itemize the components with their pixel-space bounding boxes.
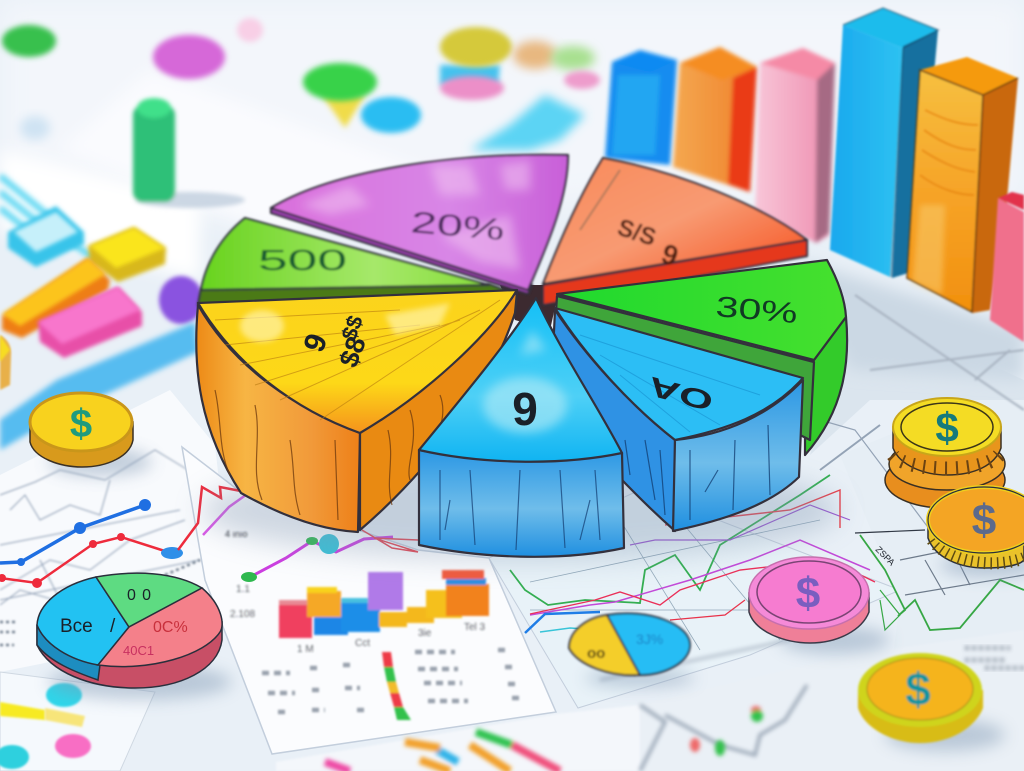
blurred table text: 3ie [418, 628, 432, 639]
slice: yellow: $$ [336, 312, 368, 344]
stack top coin [893, 427, 1001, 475]
blue line series [0, 505, 145, 563]
mini pie: bottom left: / [110, 616, 116, 637]
mini pie: centre: 3J% [636, 631, 663, 647]
coin stack: right: $ [935, 404, 959, 451]
slice: yellow [196, 290, 517, 532]
slice: blue centre [419, 298, 624, 557]
paper: far right chart: ZSPA [874, 544, 897, 568]
paper: centre bottom report [178, 447, 556, 754]
blurred table text [230, 584, 486, 655]
paper: centre bottom report: 4 ınıo [225, 529, 248, 539]
paper: far right chart [800, 260, 1024, 680]
bar: right pink [990, 192, 1024, 342]
mini pie: bottom left [37, 573, 222, 688]
stack bottom coin [885, 452, 1005, 508]
centre line series [250, 537, 393, 577]
coin: pink [749, 557, 869, 643]
slice: purple 20% [271, 155, 568, 294]
slice: orange top: 6 [657, 237, 683, 272]
slice: green left: 500 [258, 245, 347, 277]
coin shadows [48, 448, 1024, 751]
coin: left gold: $ [70, 402, 92, 446]
coin: bottom right: $ [905, 663, 931, 715]
slice: green right [556, 260, 847, 455]
mini bar chart [279, 570, 489, 638]
coin: left gold [30, 393, 133, 467]
slice: green right: 30% [714, 291, 799, 330]
paper: bottom sheets [0, 630, 1024, 771]
coin: bottom right [858, 653, 983, 743]
slice: purple 20%: 20% [409, 206, 506, 247]
coin: right single: $ [972, 496, 996, 545]
stack middle coin [889, 438, 1005, 490]
red line series [0, 537, 171, 583]
slice: blue right: OA [645, 371, 716, 417]
slice: yellow: $8 [333, 333, 372, 371]
pie shadow [200, 460, 840, 560]
slice: orange top [543, 158, 807, 305]
mini pie: centre: oo [587, 645, 605, 662]
blue trend [525, 612, 600, 633]
mini pie: centre [569, 613, 690, 675]
blurred table text: 1 M [297, 644, 314, 655]
red and magenta zigzag [178, 487, 246, 550]
bar chart: blurred 3D bars [605, 8, 1024, 342]
slice: blue centre: 9 [512, 383, 538, 435]
pie hub [500, 285, 560, 330]
coin: pink: $ [796, 569, 820, 618]
slice: blue right [551, 308, 803, 531]
bar: blue small [605, 50, 677, 165]
mini pie: bottom left: 40C1 [123, 643, 154, 658]
vertical colour strip [382, 652, 411, 720]
slice: orange top: S/S [614, 214, 659, 252]
coin stack: right [885, 398, 1005, 508]
blurred table text: 2.108 [230, 609, 255, 620]
slice: yellow: 9 [298, 329, 334, 356]
blurred left blocks [0, 176, 203, 450]
mini pie: bottom left: 0C% [153, 619, 188, 636]
paper: right chart [489, 475, 900, 708]
blurred table text: 1.1 [236, 584, 250, 595]
blurred table text: Tel 3 [464, 622, 486, 633]
bar: tall blue [830, 8, 938, 278]
coin: right single [928, 487, 1024, 568]
mini pie: bottom left: 00 [127, 587, 151, 604]
slice: green left [198, 218, 510, 305]
pie chart [196, 155, 847, 557]
blurred background blobs [2, 18, 600, 150]
paper: left line chart [0, 390, 235, 672]
blurred table text: Cct [355, 638, 370, 649]
bar: tall orange [907, 57, 1018, 313]
bar: orange [673, 47, 757, 192]
mini pie: bottom left: Bce [60, 616, 93, 637]
bar: pink [755, 48, 835, 243]
blurred green cylinder [133, 98, 245, 208]
